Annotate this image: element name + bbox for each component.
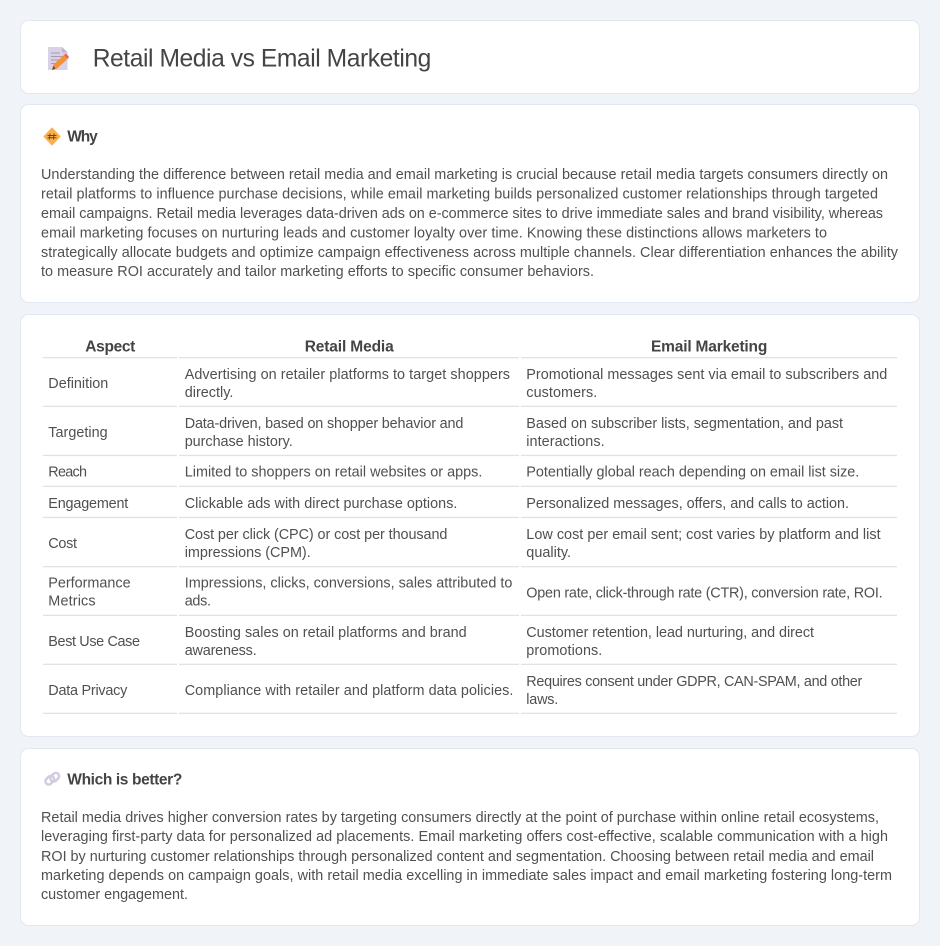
- row: performance metrics: Performance: [48, 576, 131, 592]
- table header row: Retail Media: [305, 339, 394, 356]
- panel: which is better: [20, 748, 920, 926]
- row: cost: quality.: [526, 545, 571, 561]
- row: engagement: [48, 496, 849, 512]
- table header row: Aspect: [85, 339, 135, 356]
- row: best use case: promotions.: [526, 643, 602, 659]
- row: cost: Low cost per email sent; cost varies by platform and list: [526, 527, 881, 543]
- row: data privacy: laws.: [526, 692, 558, 708]
- heading: which is better: Which is better?: [67, 771, 182, 788]
- row: targeting: [48, 416, 843, 450]
- row: best use case: Best Use Case: [48, 634, 140, 650]
- text block: verdict: ROI by nurturing customer relationships through personalized content and segmentation. Choosing between retail media and email: [41, 849, 874, 865]
- text block: why explanation: email campaigns. Retail media leverages data-driven ads on e-commerce sites to drive immediate sales and brand visibility, whereas: [41, 206, 883, 222]
- icon: memo with pencil: [48, 47, 69, 70]
- panel: why: [20, 104, 920, 302]
- row: reach: Potentially global reach depending on email list size.: [526, 465, 859, 481]
- row: performance metrics: Open rate, click-through rate (CTR), conversion rate, ROI.: [526, 585, 883, 601]
- row: cost: impressions (CPM).: [185, 545, 311, 561]
- row: reach: [48, 465, 859, 481]
- text block: why explanation: retail platforms to influence purchase decisions, while email marketing builds personalized customer relationships through targeted: [41, 186, 878, 202]
- row: targeting: Targeting: [48, 425, 108, 441]
- row: engagement: Engagement: [48, 496, 128, 512]
- row: definition: Promotional messages sent via email to subscribers and: [526, 367, 887, 383]
- row: data privacy: [48, 674, 863, 708]
- table header row: Email Marketing: [651, 339, 767, 356]
- row: data privacy: Requires consent under GDPR, CAN-SPAM, and other: [526, 674, 863, 690]
- row: performance metrics: ads.: [185, 594, 211, 610]
- row: best use case: [48, 625, 814, 659]
- row: data privacy: Data Privacy: [48, 683, 128, 699]
- row: cost: [48, 527, 881, 561]
- row: definition: Definition: [48, 376, 108, 392]
- text block: why explanation: strategically allocate budgets and optimize campaign effectiveness across multiple channels. Clear differentiation enhances the ability: [41, 245, 899, 261]
- row: performance metrics: Impressions, clicks, conversions, sales attributed to: [185, 576, 512, 592]
- row: best use case: Customer retention, lead nurturing, and direct: [526, 625, 814, 641]
- text block: verdict: leveraging first-party data for personalized ad placements. Email marketing offers cost-effective, scalable communication with a high: [41, 829, 888, 845]
- row: engagement: Clickable ads with direct purchase options.: [185, 496, 457, 512]
- row: definition: customers.: [526, 385, 597, 401]
- row: definition: Advertising on retailer platforms to target shoppers: [185, 367, 510, 383]
- text block: why explanation: Understanding the difference between retail media and email marketing is crucial because retail media targets consumers directly on: [41, 167, 888, 183]
- row: cost: Cost: [48, 536, 77, 552]
- row: reach: Reach: [48, 465, 87, 481]
- text block: why explanation: to measure ROI accurately and tailor marketing efforts to specific consumer behaviors.: [41, 264, 594, 280]
- row: definition: directly.: [185, 385, 233, 401]
- row: performance metrics: Metrics: [48, 594, 96, 610]
- row: targeting: purchase history.: [185, 434, 293, 450]
- row: targeting: Based on subscriber lists, segmentation, and past: [526, 416, 843, 432]
- icon: orange diamond sign: [44, 128, 60, 145]
- text block: verdict: [41, 810, 892, 903]
- panel: comparison table: [20, 314, 920, 736]
- row: best use case: Boosting sales on retail platforms and brand: [185, 625, 467, 641]
- row: definition: [48, 367, 887, 401]
- panel: title header: [20, 20, 920, 94]
- row: data privacy: Compliance with retailer and platform data policies.: [185, 683, 513, 699]
- row: best use case: awareness.: [185, 643, 257, 659]
- row: performance metrics: [48, 576, 883, 610]
- row: cost: Cost per click (CPC) or cost per thousand: [185, 527, 447, 543]
- icon: chain link: [44, 772, 60, 786]
- text block: why explanation: email marketing focuses on nurturing leads and customer loyalty over time. Knowing these distinctions allows marketers to: [41, 225, 827, 241]
- row: engagement: Personalized messages, offers, and calls to action.: [526, 496, 849, 512]
- table header row: [85, 339, 767, 356]
- heading: why: Why: [67, 129, 98, 146]
- row: targeting: interactions.: [526, 434, 605, 450]
- text block: verdict: Retail media drives higher conversion rates by targeting consumers directly at the point of purchase within online retail ecosystems,: [41, 810, 879, 826]
- row: targeting: Data-driven, based on shopper behavior and: [185, 416, 463, 432]
- text block: why explanation: [41, 167, 899, 280]
- text block: verdict: customer engagement.: [41, 887, 188, 903]
- text block: verdict: marketing depends on campaign goals, with retail media excelling in immediate sales impact and email marketing fostering long-term: [41, 868, 892, 884]
- title: Retail Media vs Email Marketing: [93, 46, 431, 73]
- row: reach: Limited to shoppers on retail websites or apps.: [185, 465, 482, 481]
